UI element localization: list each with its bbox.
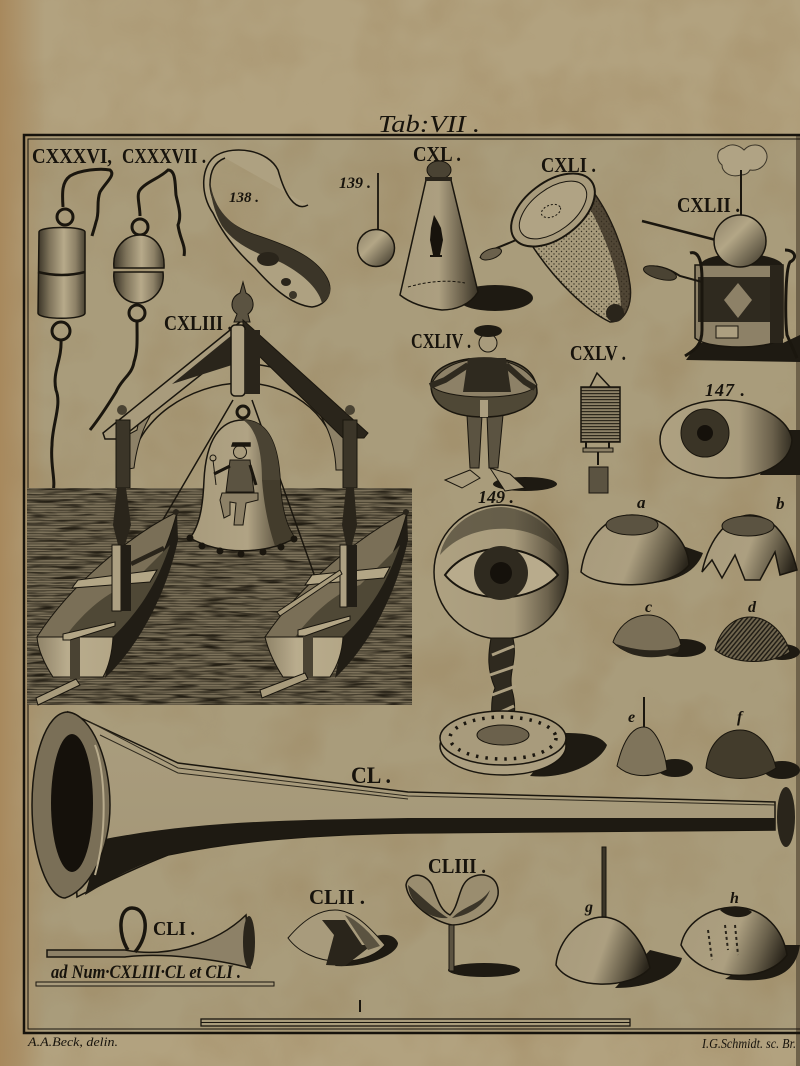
model a — [581, 493, 703, 585]
diving bell — [186, 420, 298, 558]
oar — [130, 546, 165, 566]
arches — [170, 364, 300, 384]
model b: b — [776, 494, 784, 513]
hull dark side — [335, 512, 408, 678]
torso — [463, 358, 511, 392]
stern — [37, 637, 113, 677]
dome CLII: CLII . — [309, 885, 365, 909]
thwart — [305, 567, 390, 585]
suspension ropes — [147, 400, 315, 577]
fish dark dorsal band — [210, 180, 330, 303]
cylinder CXXXVI with rope — [38, 169, 112, 492]
label 138: 138 . — [229, 190, 259, 206]
horn shadow — [85, 818, 775, 895]
coals — [700, 254, 783, 265]
tiller — [63, 622, 115, 640]
pendulum 139 — [339, 173, 394, 266]
model e — [617, 697, 693, 777]
eye model 149: 149 . — [478, 487, 514, 507]
figure numbers CXXXVI and CXXXVII: CXXXVI, — [32, 144, 112, 168]
stern — [265, 637, 343, 677]
weight device CXLV: CXLV . — [570, 341, 626, 365]
arms — [430, 365, 535, 388]
floor shadow — [493, 477, 557, 491]
man in ring CXLIV: CXLIV . — [411, 329, 471, 353]
fish 138 — [204, 150, 330, 307]
furnace shadow — [686, 335, 800, 362]
legs — [467, 415, 503, 468]
pedestal — [340, 545, 347, 607]
rudder — [36, 679, 80, 705]
pendulum 139: 139 . — [339, 175, 371, 192]
floor — [295, 545, 400, 637]
model e: e — [628, 709, 635, 726]
title: Tab:VII . — [378, 112, 480, 138]
small trumpet CLI — [47, 908, 255, 968]
head — [479, 334, 497, 352]
model c — [613, 599, 706, 657]
bell frame CXLIII — [103, 320, 368, 488]
handle — [645, 266, 702, 282]
model c: c — [645, 599, 652, 616]
cone CXL — [400, 142, 533, 311]
furnace CXLII — [642, 145, 800, 362]
bell rim balls — [186, 534, 298, 558]
inner wall — [265, 512, 407, 637]
model d: d — [748, 599, 757, 616]
dark right edge — [796, 135, 800, 1066]
dome h: h — [730, 890, 739, 907]
eye 147 — [660, 380, 800, 478]
man in ring CXLIV — [411, 325, 557, 491]
centre post — [231, 325, 245, 396]
dome g with needle: g — [584, 899, 593, 916]
model d — [715, 599, 800, 662]
bell dome shading — [243, 420, 280, 480]
rudder — [260, 673, 308, 698]
base holes — [450, 717, 556, 759]
sea — [27, 488, 412, 705]
flippers — [445, 468, 525, 491]
thwart — [72, 570, 157, 588]
ring — [431, 358, 537, 417]
dome g with needle — [556, 847, 682, 988]
browned left edge — [0, 0, 45, 1066]
steam — [718, 145, 767, 176]
roof left — [103, 322, 240, 439]
net CXLI: CXLI . — [541, 153, 596, 177]
figure numbers CXXXVI and CXXXVII — [32, 144, 206, 168]
label CL: CL . — [351, 763, 391, 788]
furnace CXLII: CXLII . — [677, 193, 740, 217]
left post — [117, 405, 127, 415]
left boat — [36, 509, 179, 705]
weight device CXLV — [570, 341, 626, 493]
small mark — [359, 1000, 361, 1012]
eye 147: 147 . — [705, 380, 746, 400]
small trumpet CLI: CLI . — [153, 918, 195, 940]
net CXLI — [479, 153, 631, 322]
inner wall — [37, 512, 177, 637]
finial — [232, 282, 253, 322]
screw stem — [489, 638, 515, 735]
model b — [702, 494, 797, 580]
forked object CLIII: CLIII . — [428, 854, 486, 878]
horn body — [68, 712, 775, 897]
cone CXL: CXL . — [413, 142, 461, 166]
right boat — [260, 509, 409, 698]
caption ad Num. CXLIII-CL et CLI: ad Num·CXLIII·CL et CLI . — [51, 962, 241, 983]
base shadow — [530, 733, 607, 777]
label CXLIII: CXLIII . — [164, 311, 232, 335]
floor — [65, 545, 170, 637]
engraving lines on top — [90, 722, 775, 805]
oar — [277, 570, 342, 616]
forked object CLIII — [406, 854, 520, 977]
tiller — [298, 616, 350, 636]
eye model 149 — [434, 487, 607, 777]
spindles above boats — [113, 488, 357, 545]
hull dark side — [105, 512, 178, 678]
base — [440, 717, 566, 775]
mouth rim — [32, 712, 110, 898]
oval vessel CXXXVII with rope — [90, 170, 184, 430]
body — [695, 265, 783, 347]
dome h — [681, 890, 800, 980]
model f — [706, 709, 800, 779]
figure numbers CXXXVI and CXXXVII: CXXXVII . — [122, 144, 206, 168]
dome CLII — [288, 885, 398, 966]
roof right — [243, 320, 368, 438]
pedestal — [112, 545, 121, 611]
right post — [345, 405, 355, 415]
model f: f — [737, 709, 744, 726]
legs — [685, 250, 797, 358]
diver in bell — [210, 443, 258, 525]
signature left: A.A.Beck, delin. — [27, 1034, 118, 1049]
model a: a — [637, 493, 646, 512]
end disc — [777, 787, 795, 847]
scale bar — [201, 1019, 630, 1026]
large ear trumpet CL — [32, 712, 795, 898]
